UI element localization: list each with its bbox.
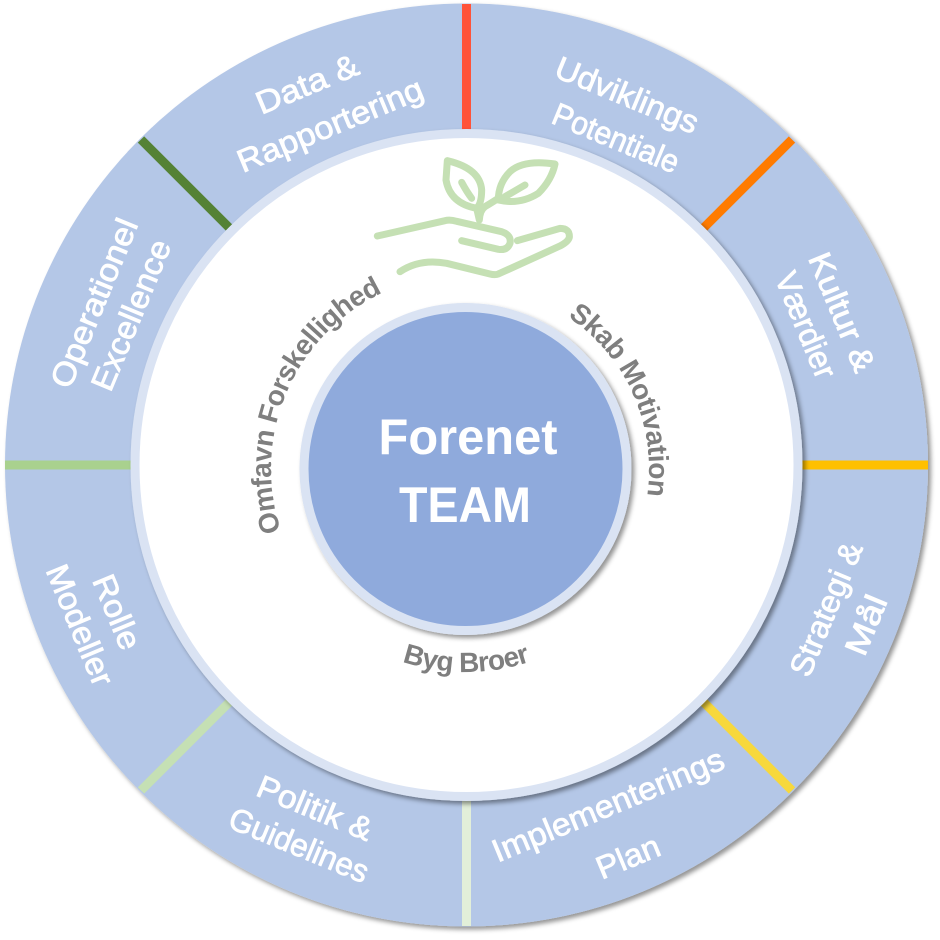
center title: Forenet (378, 409, 558, 465)
label: Operationel Excellence: Excellence (84, 234, 178, 396)
inner white disc with pale ring (135, 134, 798, 796)
label: Kultur & Værdier: Kultur & (801, 247, 883, 377)
separator: amber (802, 460, 928, 470)
center circle (304, 308, 627, 630)
label: Politik & Guidelines: Guidelines (224, 800, 374, 890)
label: Implementerings Plan: Implementerings (487, 741, 729, 869)
center title (378, 409, 558, 533)
label: Rolle Modeller: Rolle (85, 569, 149, 655)
center title: TEAM (399, 477, 531, 533)
label: Strategi & Mål: Mål (838, 589, 894, 661)
label: Implementerings Plan: Plan (591, 828, 665, 886)
label: Data & Rapportering: Rapportering (232, 70, 428, 180)
label: Strategi & Mål: Strategi & (782, 537, 870, 681)
label: Rolle Modeller: Modeller (39, 559, 121, 691)
label: Kultur & Værdier (768, 247, 883, 384)
curved text: Byg Broer: Byg Broer (404, 644, 527, 677)
curved text: Omfavn Forskellighed: Omfavn Forskellighed (251, 276, 381, 533)
separator: mid green (5, 460, 131, 470)
separator: yellow (704, 702, 792, 790)
label: Politik & Guidelines: Politik & (252, 768, 378, 848)
separator: red (462, 4, 471, 130)
label: Udviklings Potentiale: Udviklings (550, 49, 704, 141)
icon: hand holding sprout (377, 161, 569, 275)
separator: dark green (141, 140, 229, 228)
label: Udviklings Potentiale (547, 49, 704, 180)
label: Operationel Excellence (43, 213, 178, 396)
separator: orange (704, 140, 792, 228)
separator: pale green (462, 800, 471, 926)
curved text: Skab Motivation: Skab Motivation (570, 304, 670, 496)
label: Operationel Excellence: Operationel (43, 213, 145, 393)
label: Data & Rapportering: Data & (250, 47, 364, 121)
label: Udviklings Potentiale: Potentiale (547, 96, 685, 180)
separator: light green (141, 702, 229, 790)
label: Kultur & Værdier: Værdier (768, 266, 844, 384)
